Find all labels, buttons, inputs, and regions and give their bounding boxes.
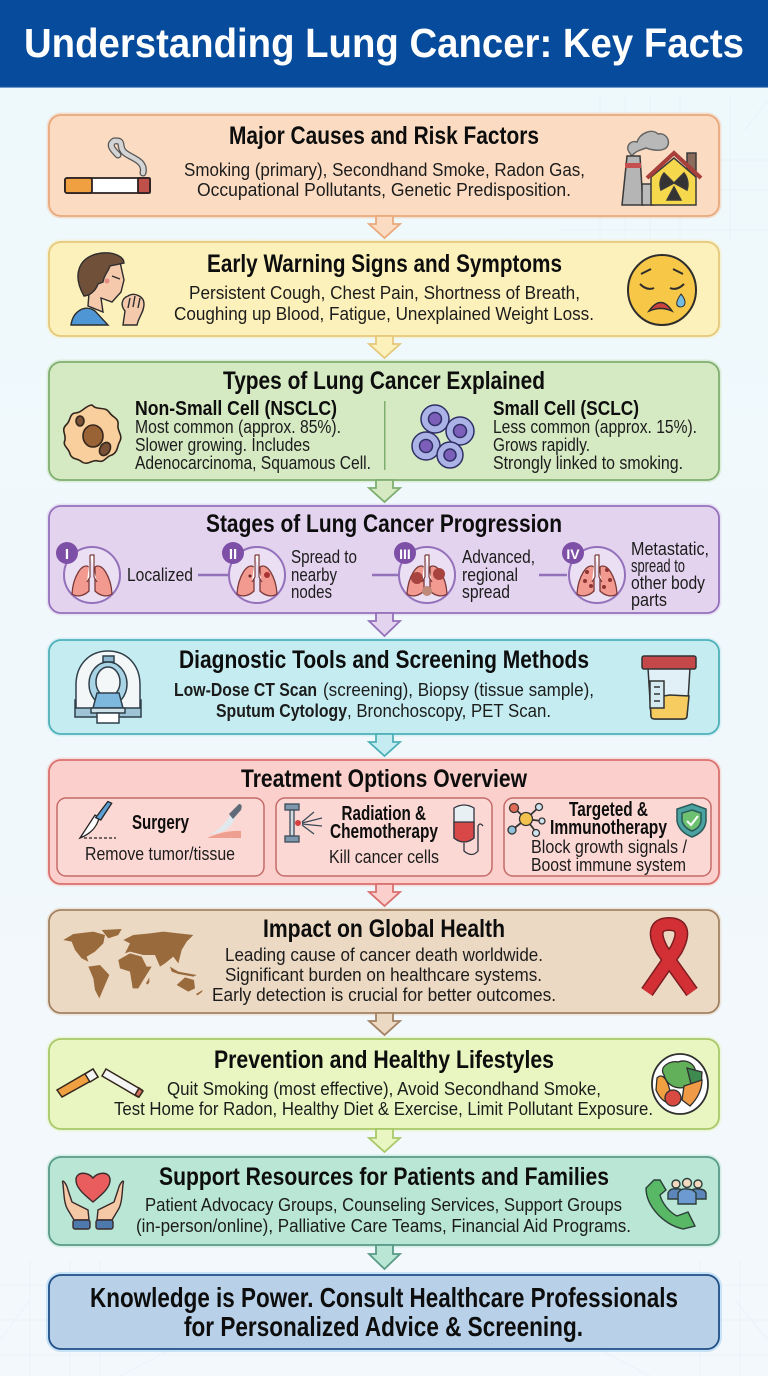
- text: diagnostics: (screening), Biopsy (tissue sample),: [323, 679, 594, 700]
- icon: broken cigarette: [57, 1069, 143, 1097]
- text: small cell: Grows rapidly.: [493, 435, 590, 455]
- text: symptoms: Persistent Cough, Chest Pain, Shortness of Breath,: [189, 282, 580, 303]
- icon: shield: [677, 804, 706, 837]
- heading: symptoms: Early Warning Signs and Symptoms: [207, 250, 562, 278]
- icon: IV bag: [454, 805, 483, 854]
- panel: treatment: [49, 760, 719, 906]
- stage II: II: [229, 546, 237, 563]
- panel: stages: [49, 506, 719, 636]
- icon: scalpel on tissue: [207, 804, 242, 838]
- text: small cell: [493, 398, 697, 473]
- stage IV: parts: [631, 590, 667, 610]
- icon: sad face: [628, 255, 696, 325]
- stage III: spread: [462, 582, 510, 602]
- text: diagnostics: [174, 679, 594, 721]
- text: symptoms: [174, 282, 594, 324]
- panel: diagnostics: [49, 640, 719, 756]
- icon: non-small cell: [64, 405, 121, 463]
- text: call to action: for Personalized Advice & Screening.: [184, 1311, 583, 1342]
- text: diagnostics: Sputum Cytology: [216, 700, 348, 721]
- panel: causes: [49, 115, 719, 238]
- heading: causes: Major Causes and Risk Factors: [229, 122, 539, 150]
- text: prevention: Test Home for Radon, Healthy Diet & Exercise, Limit Pollutant Exposure.: [114, 1098, 653, 1119]
- arrow: diagnostics to treatment: [369, 734, 400, 756]
- icon: factory and radon house: [622, 131, 701, 205]
- text: non-small cell: Slower growing. Includes: [135, 435, 310, 455]
- card: targeted: Targeted &: [569, 799, 648, 821]
- stage IV: [562, 539, 709, 610]
- stage II: [222, 542, 357, 603]
- arrow: impact to prevention: [369, 1013, 400, 1035]
- heading: treatment: Treatment Options Overview: [241, 765, 527, 793]
- text: causes: Smoking (primary), Secondhand Smoke, Radon Gas,: [184, 159, 585, 180]
- arrow: types to stages: [369, 480, 400, 502]
- text: non-small cell: [135, 398, 371, 473]
- stage III: [394, 542, 535, 603]
- stage III: regional: [462, 565, 518, 585]
- stage IV: Metastatic,: [631, 539, 709, 559]
- arrow: stages to diagnostics: [369, 613, 400, 636]
- icon: awareness ribbon: [647, 924, 692, 992]
- text: causes: Occupational Pollutants, Genetic Predisposition.: [197, 179, 571, 200]
- card: targeted: Block growth signals /: [531, 837, 687, 857]
- text: small cell: Strongly linked to smoking.: [493, 453, 683, 473]
- text: non-small cell: Adenocarcinoma, Squamous Cell.: [135, 453, 371, 473]
- icon: CT scanner: [75, 651, 141, 723]
- text: symptoms: Coughing up Blood, Fatigue, Unexplained Weight Loss.: [174, 303, 594, 324]
- arrow: support to call to action: [369, 1245, 400, 1269]
- heading: support: Support Resources for Patients and Families: [159, 1163, 609, 1191]
- icon: world map: [63, 929, 203, 998]
- stage II: nodes: [291, 582, 332, 602]
- card: radiation: [276, 798, 492, 876]
- stage II: Spread to: [291, 547, 357, 567]
- card: surgery: Remove tumor/tissue: [85, 844, 235, 864]
- text: call to action: [90, 1282, 678, 1342]
- card: radiation: Radiation &: [342, 803, 426, 825]
- panel: call to action: [49, 1275, 719, 1349]
- card: radiation: Chemotherapy: [330, 821, 439, 843]
- icon: healthy plate: [652, 1054, 708, 1114]
- icon: radiation beam: [285, 804, 322, 842]
- heading: diagnostics: Diagnostic Tools and Screening Methods: [179, 646, 589, 674]
- arrow: symptoms to types: [369, 336, 400, 358]
- icon: phone and people: [646, 1178, 706, 1229]
- panel: support: [49, 1157, 719, 1269]
- card: targeted: [504, 798, 711, 876]
- text: prevention: [114, 1078, 653, 1119]
- icon: small cells: [412, 405, 474, 468]
- text: causes: [184, 159, 585, 200]
- text: diagnostics: , Bronchoscopy, PET Scan.: [347, 700, 551, 721]
- panel: symptoms: [49, 242, 719, 358]
- text: non-small cell: Non-Small Cell (NSCLC): [135, 398, 337, 420]
- stage III: Advanced,: [462, 547, 535, 567]
- text: prevention: Quit Smoking (most effective), Avoid Secondhand Smoke,: [167, 1078, 601, 1099]
- icon: scalpel: [80, 800, 116, 838]
- panel: types: [49, 362, 719, 502]
- stage I: I: [65, 546, 69, 563]
- stage I: Localized: [127, 565, 193, 585]
- icon: cigarette: [65, 141, 150, 193]
- text: global impact: [212, 944, 556, 1005]
- card: targeted: Boost immune system: [531, 855, 686, 875]
- text: diagnostics: Low-Dose CT Scan: [174, 679, 317, 700]
- heading: global impact: Impact on Global Health: [263, 915, 505, 943]
- icon: hands holding heart: [63, 1173, 123, 1229]
- stage II: nearby: [291, 565, 337, 585]
- heading: stages: Stages of Lung Cancer Progression: [206, 510, 562, 538]
- header banner: [0, 0, 768, 88]
- stage III: III: [399, 546, 411, 562]
- arrow: causes to symptoms: [369, 216, 400, 238]
- card: targeted: Immunotherapy: [550, 817, 668, 839]
- text: global impact: Leading cause of cancer death worldwide.: [225, 944, 543, 965]
- stage IV: IV: [566, 546, 580, 562]
- card: surgery: [57, 798, 264, 876]
- stage I: [56, 542, 193, 603]
- text: global impact: Early detection is crucial for better outcomes.: [212, 984, 556, 1005]
- text: support: Patient Advocacy Groups, Counseling Services, Support Groups: [145, 1194, 622, 1215]
- arrow: treatment to impact: [369, 884, 400, 906]
- icon: coughing man: [71, 253, 144, 325]
- stage IV: spread to: [631, 556, 685, 576]
- text: non-small cell: Most common (approx. 85%).: [135, 417, 341, 437]
- heading: types: Types of Lung Cancer Explained: [223, 367, 545, 395]
- text: small cell: Less common (approx. 15%).: [493, 417, 697, 437]
- icon: sample cup: [642, 656, 696, 719]
- text: support: [136, 1194, 631, 1236]
- text: small cell: Small Cell (SCLC): [493, 398, 639, 420]
- text: support: (in-person/online), Palliative Care Teams, Financial Aid Programs.: [136, 1215, 631, 1236]
- text: global impact: Significant burden on healthcare systems.: [225, 964, 542, 985]
- stage IV: other body: [631, 573, 705, 593]
- arrow: prevention to support: [369, 1129, 400, 1152]
- card: radiation: Kill cancer cells: [329, 847, 439, 867]
- panel: global impact: [49, 910, 719, 1035]
- card: surgery: Surgery: [132, 812, 190, 834]
- panel: prevention: [49, 1039, 719, 1152]
- icon: molecule: [508, 804, 545, 836]
- heading: prevention: Prevention and Healthy Lifestyles: [214, 1046, 554, 1074]
